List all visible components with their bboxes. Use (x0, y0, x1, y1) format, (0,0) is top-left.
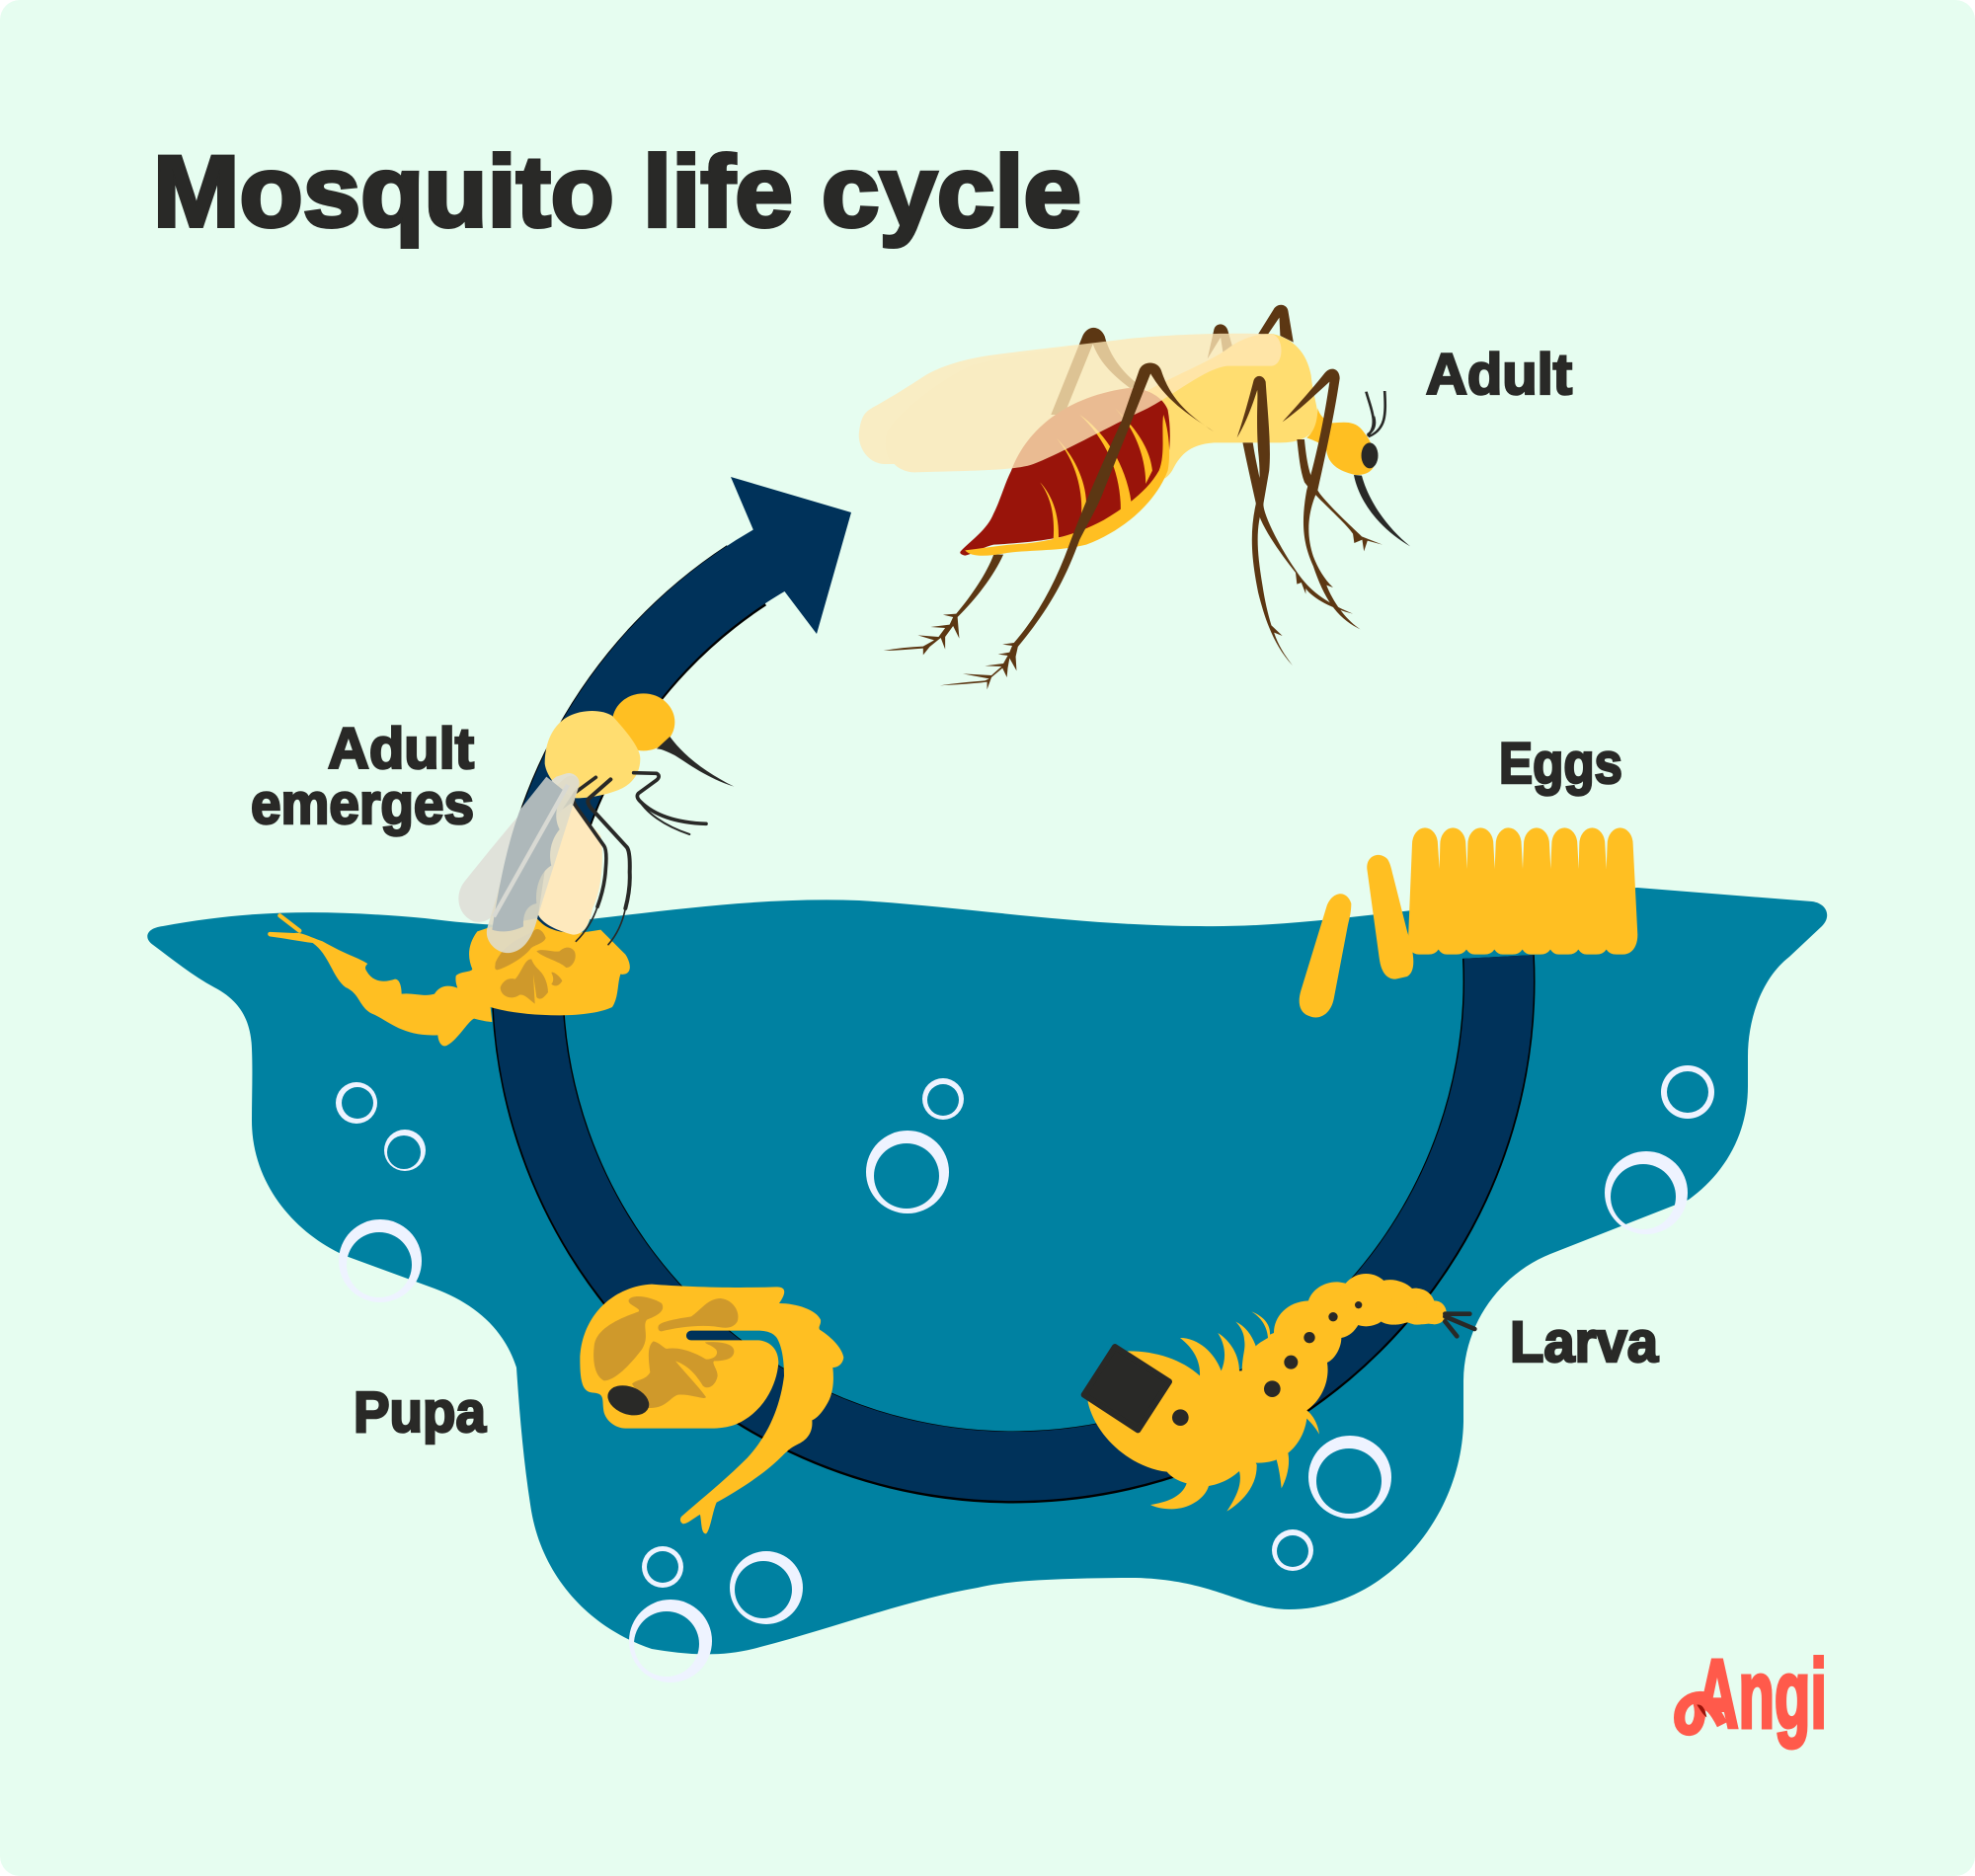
larva siphon bristles (1445, 1314, 1474, 1336)
abdomen stripes (965, 408, 1169, 556)
front legs (940, 362, 1382, 689)
logo loop shadow (1697, 1704, 1706, 1717)
bubble (384, 1130, 426, 1171)
icon: pupa (580, 1285, 843, 1533)
legs (573, 773, 706, 945)
tail fork (270, 915, 299, 935)
bubble (1272, 1529, 1313, 1571)
label: Adult emerges: emerges (251, 772, 474, 836)
thorax (1122, 334, 1318, 479)
proboscis (657, 737, 734, 787)
bubble (922, 1078, 964, 1120)
proboscis (1354, 475, 1410, 546)
label: Pupa: Pupa (354, 1380, 487, 1445)
eye (1362, 442, 1379, 468)
single egg (1300, 894, 1351, 1017)
bubble (339, 1219, 422, 1302)
pupa markings (593, 1296, 739, 1408)
icon: larva (1084, 1274, 1474, 1512)
label: Eggs: Eggs (1499, 732, 1622, 796)
pale abdomen (538, 803, 602, 935)
pupa body (580, 1285, 843, 1533)
icon: adult emerging from pupa (270, 693, 734, 1046)
label: Adult: Adult (1426, 343, 1572, 407)
bubble (1308, 1436, 1391, 1519)
logo loop (1680, 1697, 1722, 1730)
pupal case (270, 918, 630, 1046)
single egg (1367, 855, 1413, 979)
thorax (545, 711, 640, 798)
logo: Angi (1679, 1639, 1827, 1748)
pupa eye (603, 1380, 653, 1421)
pupal case markings (495, 929, 576, 1004)
larva head plate (1084, 1347, 1169, 1430)
wings (859, 334, 1282, 472)
bubble (866, 1131, 949, 1213)
larva body (1088, 1274, 1447, 1512)
back legs behind wing (884, 305, 1294, 655)
larva spots (1172, 1301, 1362, 1426)
bubble (1661, 1065, 1714, 1119)
logo knockout under the loop (1679, 1699, 1719, 1738)
egg raft (1408, 827, 1637, 955)
water pool (147, 888, 1827, 1654)
label: Adult emerges: Adult (328, 717, 474, 781)
icon: eggs (1300, 827, 1637, 1017)
logo wordmark: Angi (1696, 1639, 1827, 1748)
label: Adult emerges (251, 717, 474, 836)
neck and head (1306, 408, 1375, 475)
bubble (336, 1082, 377, 1124)
label: Larva: Larva (1510, 1310, 1659, 1374)
bubble (1605, 1151, 1688, 1234)
bubble (730, 1551, 803, 1624)
bubble (629, 1600, 712, 1682)
icon: adult mosquito (859, 305, 1410, 689)
antennae (1366, 391, 1385, 436)
abdomen (960, 388, 1170, 556)
bubbles (336, 1065, 1714, 1682)
cycle arrow (527, 477, 1499, 1467)
head (612, 693, 674, 750)
title: Mosquito life cycle (153, 135, 1081, 248)
bubble (642, 1546, 683, 1588)
wings (458, 773, 580, 953)
